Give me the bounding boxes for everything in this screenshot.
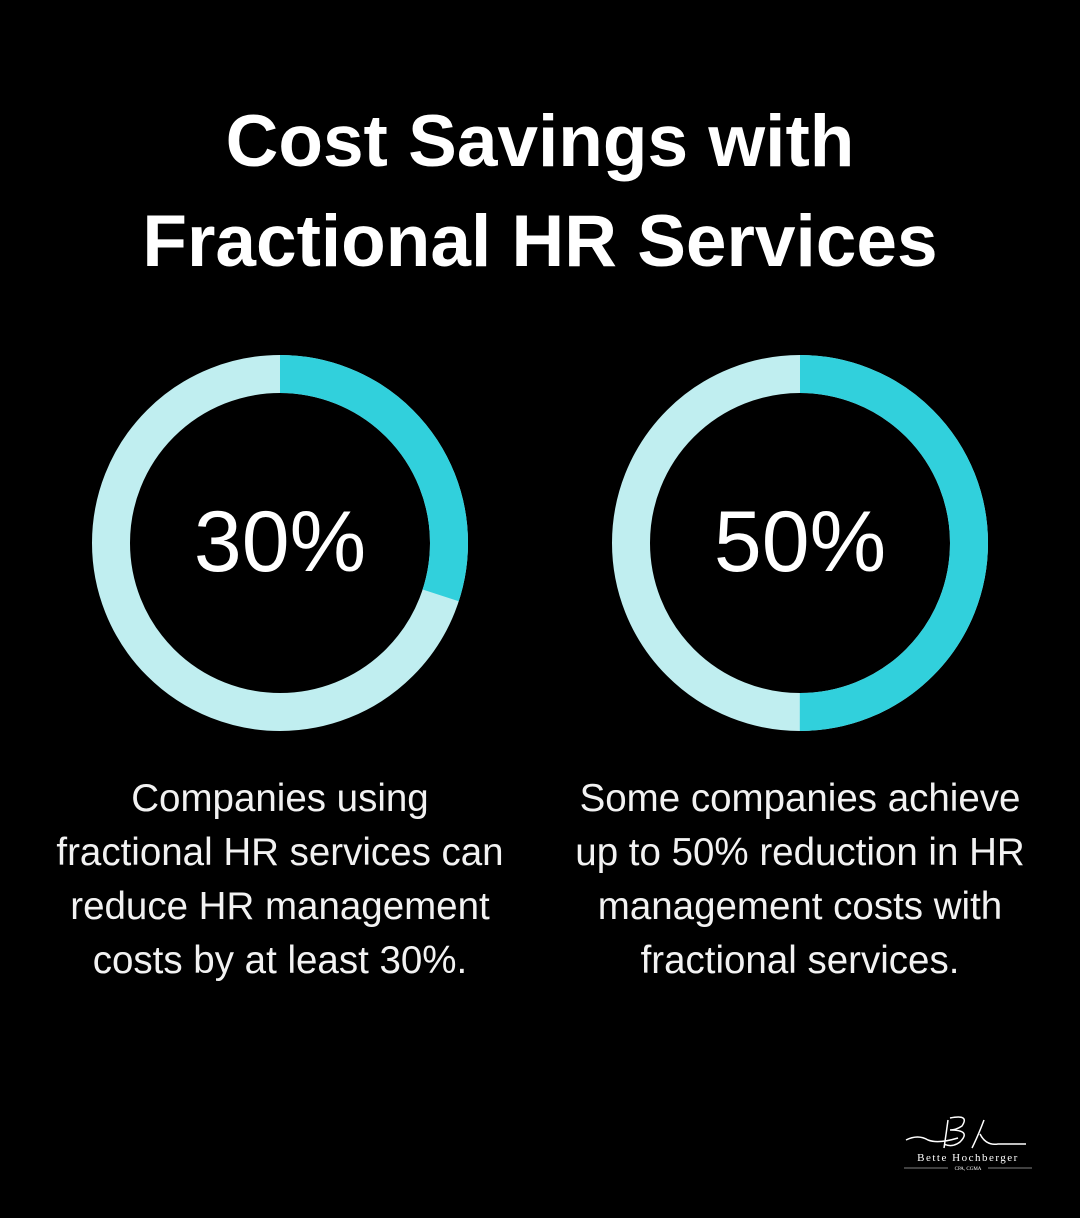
donut chart: 50% [612,355,988,731]
logo: Bette Hochberger [917,1152,1019,1164]
donut chart: 30%: 30% [194,494,366,590]
logo [904,1116,1032,1172]
text block: 50% description [575,777,1025,982]
text block: 50% description: management costs with [598,885,1002,928]
text block: 30% description: reduce HR management [70,885,490,928]
title [142,101,938,282]
title: Fractional HR Services [142,201,938,282]
donut chart: 30% [92,355,468,731]
text block: 30% description: fractional HR services can [56,831,504,874]
text block: 30% description: Companies using [131,777,429,820]
text block: 30% description: costs by at least 30%. [93,939,467,982]
text block: 30% description [56,777,504,982]
text block: 50% description: Some companies achieve [580,777,1020,820]
donut chart: 50%: 50% [714,494,886,590]
text block: 50% description: up to 50% reduction in HR [575,831,1025,874]
text block: 50% description: fractional services. [641,939,959,982]
title: Cost Savings with [226,101,854,182]
logo: CPA, CGMA [955,1167,982,1172]
